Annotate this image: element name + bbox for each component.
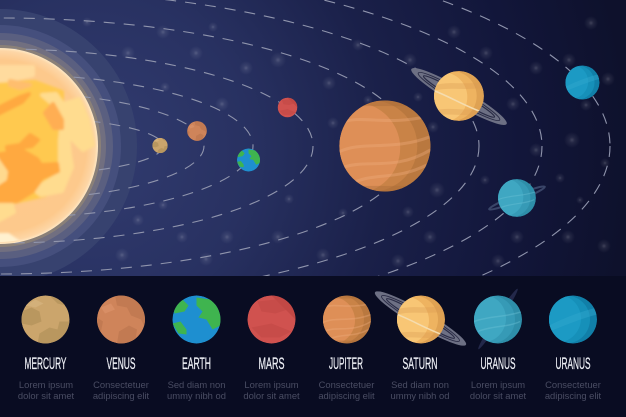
legend: jupiter: JUPITER — [329, 355, 363, 373]
legend: venus: Consectetuer — [93, 379, 149, 390]
legend: earth: Sed diam non — [168, 379, 225, 390]
sun — [0, 48, 98, 244]
legend: mercury: dolor sit amet — [18, 390, 75, 401]
planet: mercury orbit position — [152, 138, 168, 153]
legend: mercury: Lorem ipsum — [19, 379, 73, 390]
legend: uranus: dolor sit amet — [470, 390, 527, 401]
legend: venus: VENUS — [106, 355, 136, 373]
planet: earth orbit position — [237, 148, 260, 172]
legend: uranus second entry: Consectetuer — [545, 379, 601, 390]
legend: uranus — [458, 287, 527, 401]
legend: uranus second entry: adipiscing elit — [545, 390, 602, 401]
legend: mars: MARS — [258, 355, 284, 373]
legend: uranus second entry — [533, 294, 602, 401]
legend: mars: dolor sit amet — [243, 390, 300, 401]
legend panel — [0, 276, 626, 417]
legend: venus: adipiscing elit — [93, 390, 150, 401]
sun glow halo — [0, 9, 137, 283]
legend: saturn: ummy nibh od — [391, 390, 449, 401]
legend: saturn: SATURN — [402, 355, 438, 373]
legend: mercury — [18, 296, 75, 401]
background stars — [81, 16, 615, 268]
legend: jupiter: adipiscing elit — [318, 390, 375, 401]
planet: mars orbit position — [278, 98, 297, 117]
legend: saturn: Sed diam non — [391, 379, 449, 390]
space background panel — [0, 0, 626, 276]
legend: jupiter: Consectetuer — [319, 379, 374, 390]
legend: earth: EARTH — [182, 355, 211, 373]
planet: venus orbit position — [187, 121, 207, 141]
legend: uranus second entry: URANUS — [556, 355, 590, 373]
legend: mars — [243, 296, 300, 401]
planet: neptune orbit position — [554, 65, 600, 100]
legend: saturn — [371, 285, 470, 401]
legend: mars: Lorem ipsum — [244, 379, 299, 390]
planet: jupiter orbit position — [309, 100, 431, 194]
legend: uranus: Lorem ipsum — [471, 379, 525, 390]
legend: uranus: URANUS — [480, 355, 516, 373]
planet: uranus orbit position with ring — [485, 178, 546, 217]
legend: venus — [93, 296, 150, 401]
legend: earth — [167, 296, 226, 401]
legend: mercury: MERCURY — [24, 355, 66, 373]
legend: jupiter — [307, 296, 375, 401]
legend: earth: ummy nibh od — [167, 390, 226, 401]
planet: saturn orbit position with ring — [407, 62, 511, 131]
